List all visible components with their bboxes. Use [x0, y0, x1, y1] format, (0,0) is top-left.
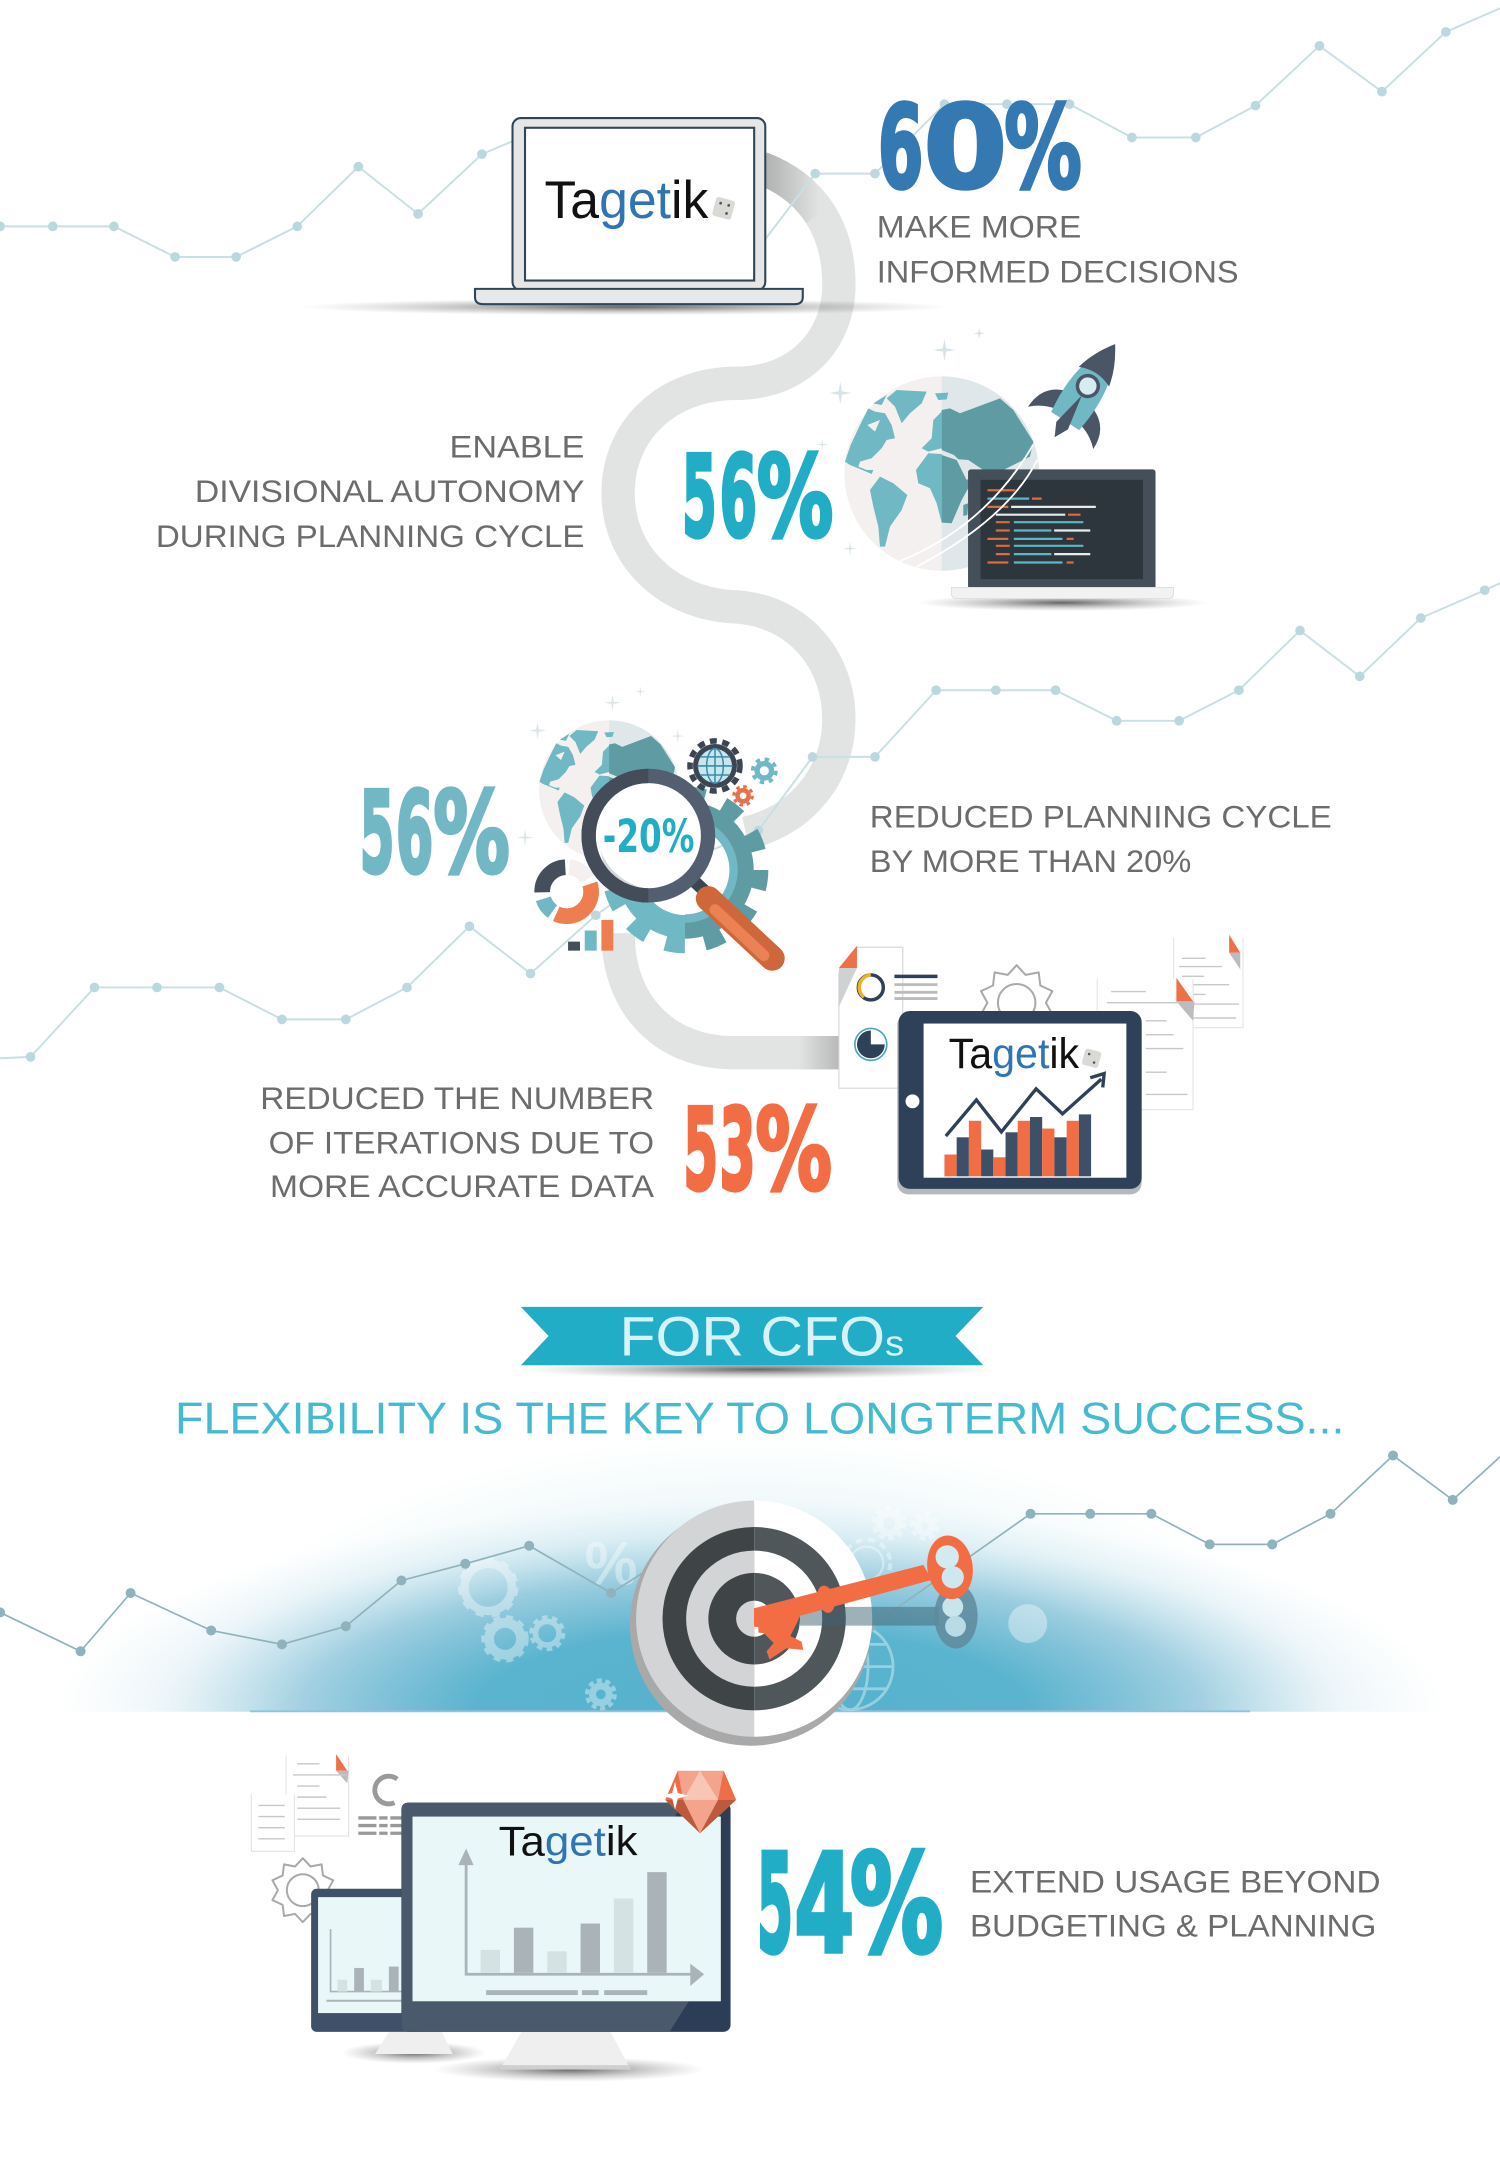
small globe gear [690, 741, 740, 791]
text: reduced planning cycle: BY MORE THAN 20% [870, 844, 1191, 879]
magnifier handle [690, 878, 772, 958]
trend line: target section [0, 1455, 1500, 1651]
stat: 56% second: 5 [360, 768, 394, 899]
text: extend usage: EXTEND USAGE BEYOND [970, 1864, 1381, 1899]
logo: Tagetik: Tagetik [544, 171, 709, 230]
text: enable divisional autonomy [156, 430, 585, 554]
icon: rocket [1022, 323, 1148, 458]
icon: dice [1081, 1048, 1102, 1068]
document back right [1174, 935, 1243, 1028]
illustration: documents and tablet [839, 935, 1243, 1194]
sparkles [517, 686, 685, 846]
banner: for CFOs [521, 1305, 993, 1379]
illustration: target and key [630, 1501, 978, 1746]
globe [539, 720, 679, 860]
blue glow band [110, 1476, 1392, 1712]
stat: 60%: 6 [878, 81, 924, 215]
text: reduced iterations: MORE ACCURATE DATA [270, 1169, 654, 1204]
text: make more informed decisions: MAKE MORE [877, 210, 1081, 244]
stat: 53%: 5 [683, 1085, 718, 1216]
laptop with code [917, 469, 1208, 611]
illustration: globe, rocket and code laptop [817, 323, 1208, 611]
small monitor [311, 1889, 453, 2054]
small orange gear [734, 786, 752, 805]
illustration: magnifier over globe and gears [517, 686, 776, 958]
stat: 56% first: 6 [719, 432, 757, 563]
faded background icons [460, 1508, 1047, 1710]
stand shadows [342, 2042, 706, 2082]
trend line: top [0, 8, 1500, 257]
stat: 54%: 4 [794, 1826, 854, 1984]
gear outline [272, 1858, 333, 1922]
tablet logo: Tagetik [949, 1030, 1080, 1078]
banner: for CFOs: FOR CFO s [619, 1305, 904, 1367]
winding grey path [618, 168, 842, 1053]
big monitor [401, 1803, 731, 2069]
stat: 56% second: % [433, 768, 510, 899]
text: make more informed decisions [877, 210, 1239, 290]
stat: 54%: % [850, 1826, 943, 1984]
tablet [897, 1011, 1142, 1194]
orange key [754, 1532, 977, 1660]
illustration: monitors and documents [251, 1754, 736, 2082]
faded background icons: % [585, 1530, 638, 1598]
stat: 60%: 0 [924, 81, 1007, 215]
globe [844, 376, 1039, 571]
stat: 56% second [360, 768, 510, 899]
trend line: middle [0, 583, 1500, 1058]
big gear [610, 795, 760, 945]
document with charts [839, 946, 937, 1088]
stat: 54% [757, 1826, 943, 1984]
text: reduced planning cycle [870, 800, 1332, 879]
text: reduced planning cycle: REDUCED PLANNING CYCLE [870, 800, 1332, 835]
lens text: -20%: -20% [603, 809, 694, 863]
stat: 53%: % [756, 1085, 832, 1216]
icon: dice [712, 196, 736, 220]
monitor chart [458, 1849, 704, 1995]
text: make more informed decisions: INFORMED DECISIONS [877, 255, 1239, 290]
stat: 56% first: 5 [682, 432, 717, 563]
text: reduced iterations: REDUCED THE NUMBER [260, 1081, 654, 1116]
text: reduced iterations: OF ITERATIONS DUE TO [269, 1125, 654, 1160]
text: reduced iterations [260, 1081, 654, 1204]
gray donut [375, 1776, 397, 1804]
key shadow [800, 1583, 978, 1649]
text: extend usage [970, 1864, 1381, 1944]
gear outline [981, 965, 1052, 1040]
tablet trend arrow [946, 1074, 1104, 1136]
stat: 53%: 3 [719, 1085, 756, 1216]
donut chart [542, 867, 591, 916]
small teal gear [753, 759, 776, 782]
stat: 60%: % [1004, 81, 1082, 215]
text: enable divisional autonomy: ENABLE [450, 430, 585, 465]
document front right [1097, 978, 1194, 1110]
magnifier lens [589, 776, 708, 895]
heading: flexibility: FLEXIBILITY IS THE KEY TO LONGTERM SUCCESS... [175, 1394, 1344, 1443]
gray lines [358, 1818, 403, 1833]
document sheets [251, 1754, 349, 1851]
stat: 56% second: 6 [396, 768, 433, 899]
icon: ruby [661, 1771, 736, 1833]
target board [630, 1501, 872, 1746]
stat: 60% [878, 81, 1082, 215]
stat: 56% first: % [757, 432, 833, 563]
mini bars [568, 920, 613, 951]
text: extend usage: BUDGETING & PLANNING [970, 1909, 1376, 1944]
stat: 54%: 5 [757, 1826, 793, 1984]
sparkles [817, 328, 985, 556]
monitor logo: Tagetik [499, 1817, 638, 1864]
text: enable divisional autonomy: DIVISIONAL AUTONOMY [195, 474, 585, 509]
text: enable divisional autonomy: DURING PLANNING CYCLE [156, 519, 585, 554]
stat: 56% first [682, 432, 833, 563]
laptop with logo [299, 118, 951, 315]
orbit arcs [900, 444, 1037, 567]
tablet bars [944, 1114, 1091, 1176]
stat: 53% [683, 1085, 832, 1216]
